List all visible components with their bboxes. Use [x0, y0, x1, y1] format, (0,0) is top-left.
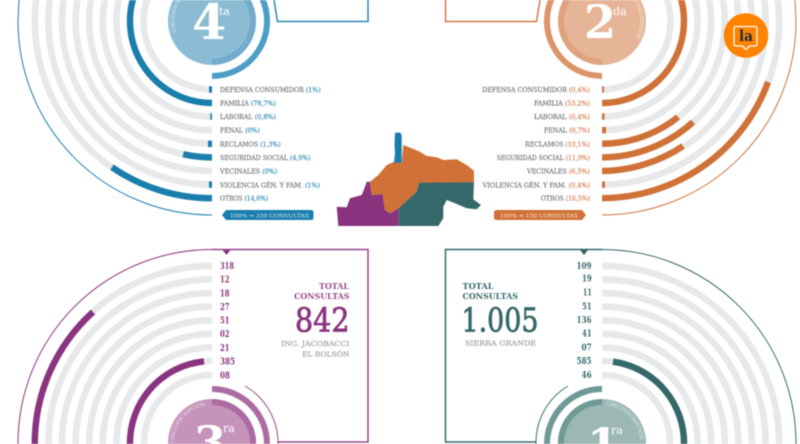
- circle badge: [558, 399, 646, 444]
- marker triangle: [222, 250, 230, 255]
- badge band: [561, 0, 602, 62]
- labels: PENAL (0%): [220, 127, 260, 135]
- gray ring tracks: [35, 0, 212, 198]
- gray ring tracks: [35, 266, 212, 444]
- values: 02: [220, 330, 230, 340]
- values: 109: [576, 262, 592, 272]
- outline: [602, 0, 796, 215]
- values: 318: [220, 262, 234, 272]
- total value: 1.005: [462, 301, 538, 340]
- circle badge: [558, 0, 646, 65]
- labels: RECLAMOS (10,1%): [525, 140, 590, 148]
- labels: RECLAMOS (1,3%): [220, 140, 281, 148]
- total box: [274, 0, 368, 22]
- number 2da: da: [613, 5, 627, 18]
- total heading: CONSULTAS: [294, 291, 350, 301]
- labels: PENAL (0,7%): [544, 127, 590, 135]
- gray ring tracks: [602, 0, 779, 198]
- inner thin arc: [536, 386, 568, 444]
- values: 08: [220, 371, 230, 381]
- scale pill: 100% = 350 CONSULTAS: [230, 213, 309, 219]
- values: 51: [582, 302, 592, 312]
- total heading: TOTAL: [319, 281, 349, 291]
- panel: 2da circunscripción: [444, 0, 798, 221]
- labels: DEFENSA CONSUMIDOR (1%): [220, 86, 321, 94]
- gray ring tracks: [602, 266, 779, 444]
- map: purple region: [337, 182, 399, 226]
- circle badge: [168, 0, 256, 65]
- map: orange region: [370, 145, 474, 213]
- labels: SEGURIDAD SOCIAL (4,9%): [220, 154, 311, 162]
- labels: VIOLENCIA GÉN. Y FAM. (0,4%): [482, 180, 590, 190]
- values: 51: [220, 316, 230, 326]
- localities: ING. JACOBACCI: [281, 340, 350, 348]
- labels: SEGURIDAD SOCIAL (11,9%): [497, 154, 590, 162]
- localities: EL BOLSÓN: [302, 350, 350, 359]
- panel: 4ta circunscripción: [16, 0, 370, 221]
- total heading: [294, 281, 350, 301]
- values: 21: [220, 344, 230, 354]
- values: 11: [583, 289, 592, 299]
- labels: LABORAL (0,4%): [534, 113, 590, 121]
- labels: FAMILIA (78,7%): [220, 100, 276, 108]
- outer band: [212, 389, 267, 444]
- outline and box: [18, 0, 212, 215]
- logo: la: la: [739, 27, 753, 45]
- total box: [446, 250, 602, 442]
- labels: OTROS (16,5%): [541, 195, 590, 203]
- values: 07: [582, 343, 592, 353]
- labels: [482, 86, 590, 203]
- outline: [602, 250, 796, 444]
- values: 385: [220, 357, 235, 367]
- badge dark band: [561, 402, 602, 444]
- total heading: TOTAL: [462, 281, 494, 291]
- total heading: CONSULTAS: [462, 291, 518, 301]
- outer band: [547, 0, 602, 76]
- values: 41: [582, 330, 592, 340]
- total box: [446, 0, 540, 22]
- number 4ta: ta: [219, 5, 230, 18]
- values: 19: [582, 275, 592, 285]
- curved label: CIRCUNSCRIPCIÓN: [606, 401, 644, 440]
- values: 585: [576, 357, 592, 367]
- total value: 842: [295, 301, 350, 340]
- scale pill: [494, 210, 586, 220]
- values: 27: [220, 303, 230, 313]
- data arcs: [112, 0, 212, 198]
- labels: FAMILIA (53,2%): [534, 100, 590, 108]
- outer band: [547, 389, 602, 444]
- logo: la: [724, 13, 768, 58]
- values: 46: [582, 371, 592, 381]
- map: green region: [399, 182, 481, 226]
- badge dark band: [212, 0, 253, 62]
- total heading: [462, 281, 518, 301]
- curved label: CIRCUNSCRIPCIÓN: [170, 402, 205, 444]
- total box: [212, 250, 368, 442]
- number 3ra: ra: [223, 422, 235, 435]
- data arc: [613, 362, 684, 444]
- localities: [281, 340, 350, 359]
- marker triangle: [580, 250, 588, 255]
- inner thin arc: [245, 386, 278, 444]
- values: 12: [220, 276, 230, 286]
- values: 18: [220, 289, 230, 299]
- labels: [219, 86, 321, 203]
- scale pill: [222, 210, 314, 220]
- map: blue region: [394, 132, 402, 163]
- data arcs: [602, 0, 768, 198]
- outline and box: [18, 250, 212, 444]
- values: [576, 262, 592, 381]
- labels: OTROS (14,6%): [220, 195, 268, 203]
- map of Río Negro circunscripciones: [337, 132, 481, 226]
- locality: SIERRA GRANDE: [465, 340, 536, 348]
- labels: DEFENSA CONSUMIDOR (0,4%): [482, 86, 590, 94]
- data arcs: [35, 312, 204, 444]
- circle badge: [168, 399, 256, 444]
- badge dark band: [212, 402, 253, 444]
- values: 136: [576, 316, 592, 326]
- scale pill: 100% = 150 CONSULTAS: [500, 213, 578, 219]
- number 1ra: ra: [611, 424, 623, 437]
- panel: 3ra circunscripción: [16, 248, 370, 444]
- outer band: [212, 0, 267, 76]
- labels: VIOLENCIA GÉN. Y FAM. (1%): [219, 180, 320, 190]
- values: [220, 262, 235, 381]
- panel: 1ra circunscripción: [444, 248, 798, 444]
- labels: VECINALES (0%): [219, 168, 277, 176]
- labels: VECINALES (6,5%): [526, 168, 590, 176]
- labels: LABORAL (0,8%): [220, 113, 276, 121]
